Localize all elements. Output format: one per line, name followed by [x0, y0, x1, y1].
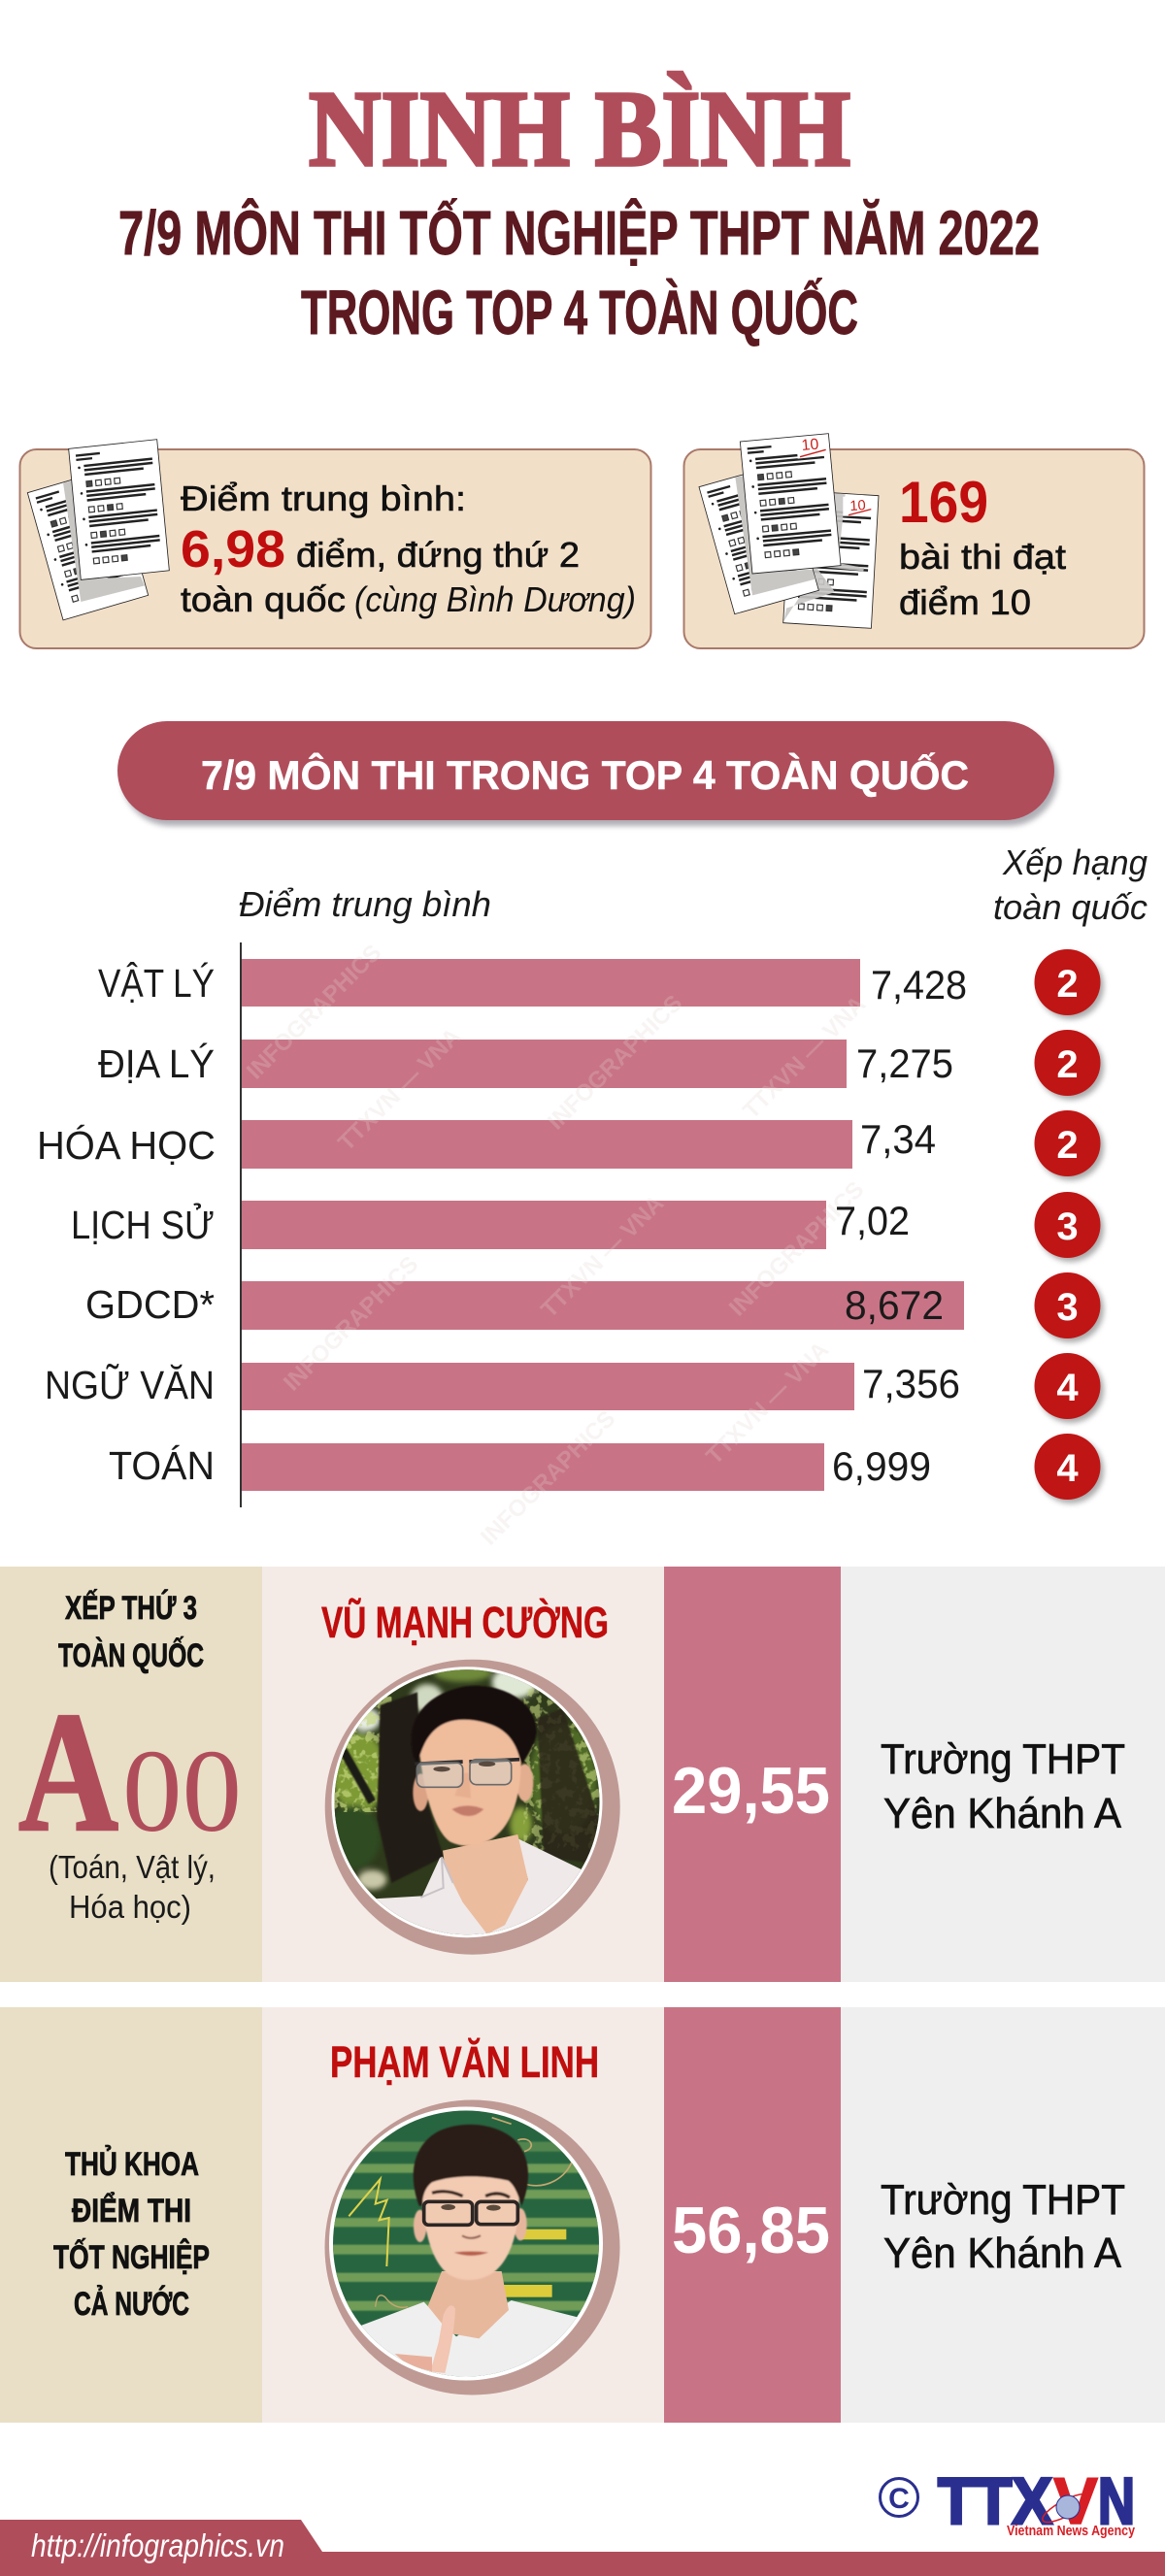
subject labels: VẬT LÝ [98, 961, 215, 1006]
values: 7,34 [860, 1116, 936, 1162]
rank label: ĐIỂM THI [72, 2193, 191, 2229]
icon: copyright [880, 2479, 918, 2516]
values [832, 962, 967, 1489]
text: average score [181, 479, 636, 619]
panel: average score [19, 440, 650, 648]
rank label: TỐT NGHIỆP [53, 2238, 210, 2276]
exam block subjects: (Toán, Vật lý, [49, 1849, 216, 1885]
logo: TTXVN [880, 2464, 1136, 2539]
school: Trường THPT [881, 1735, 1125, 1783]
title: province name: NINH BÌNH [309, 70, 850, 189]
values: 8,672 [845, 1282, 944, 1328]
subject labels: NGỮ VĂN [45, 1363, 215, 1407]
rank badges: 4 [1056, 1447, 1079, 1490]
logo wordmark: TTX [938, 2464, 1052, 2538]
watermarks: TTXVN — VNA [536, 1190, 669, 1323]
score: 56,85 [672, 2194, 830, 2267]
text: average score: Điểm trung bình: [181, 479, 466, 518]
exam block subjects [49, 1849, 216, 1925]
icon: graded exam papers: 10 [801, 436, 819, 454]
student name: PHẠM VĂN LINH [330, 2037, 599, 2087]
text: perfect scores: điểm 10 [899, 582, 1031, 622]
subject labels: GDCD* [85, 1282, 215, 1327]
icon: graded exam papers [699, 434, 879, 628]
school: Trường THPT [881, 2176, 1125, 2224]
rank label: XẾP THỨ 3 [65, 1590, 197, 1627]
text: average score: điểm, đứng thứ 2 [296, 535, 580, 575]
footer url: http://infographics.vn [31, 2527, 284, 2563]
subject labels: ĐỊA LÝ [98, 1041, 215, 1086]
icon: exam papers [27, 440, 169, 620]
watermarks: INFOGRAPHICS [242, 940, 386, 1084]
text: perfect scores: bài thi đạt [899, 537, 1066, 577]
school: Yên Khánh A [883, 2229, 1122, 2277]
values: 7,356 [862, 1361, 960, 1406]
logo wordmark: N [1098, 2464, 1135, 2538]
rank label [53, 2146, 210, 2323]
heading pill: 7/9 MÔN THI TRONG TOP 4 TOÀN QUỐC [201, 751, 969, 798]
exam block A00: A [18, 1677, 118, 1867]
values: 7,275 [856, 1040, 953, 1086]
rank badges: 2 [1056, 1043, 1079, 1086]
subtitle line 2: TRONG TOP 4 TOÀN QUỐC [301, 278, 858, 347]
bar chart [37, 940, 1104, 1550]
watermarks: INFOGRAPHICS [724, 1176, 869, 1321]
rank column title: Xếp hạng [1002, 842, 1148, 882]
watermarks: INFOGRAPHICS [279, 1251, 423, 1396]
watermarks [242, 940, 871, 1550]
text: perfect scores [899, 470, 1066, 622]
watermarks: TTXVN — VNA [738, 991, 871, 1124]
panel: student Vũ Mạnh Cường [0, 1567, 1165, 1982]
axis title: Điểm trung bình [239, 884, 491, 924]
watermarks: INFOGRAPHICS [543, 990, 687, 1135]
exam block A00 [18, 1677, 242, 1867]
school [881, 2176, 1125, 2277]
portrait [323, 1657, 620, 1955]
icon: copyright: C [888, 2483, 910, 2515]
panel: student Phạm Văn Linh [0, 2007, 1165, 2423]
values: 7,02 [835, 1198, 910, 1243]
panel: perfect scores [683, 434, 1144, 648]
rank badges: 3 [1056, 1205, 1079, 1248]
portrait [323, 2099, 619, 2395]
rank badges: 3 [1056, 1286, 1079, 1329]
bars [241, 959, 964, 1491]
logo wordmark: V [1053, 2464, 1098, 2538]
school [881, 1735, 1125, 1837]
rank badges: 4 [1056, 1367, 1079, 1409]
icon: graded exam papers: 10 [849, 498, 866, 514]
watermarks: TTXVN — VNA [701, 1337, 834, 1470]
rank column title [993, 842, 1148, 927]
watermarks: INFOGRAPHICS [476, 1405, 620, 1550]
rank label: TOÀN QUỐC [58, 1636, 204, 1674]
student name: VŨ MẠNH CƯỜNG [321, 1598, 609, 1647]
text: perfect scores: 169 [899, 470, 988, 535]
exam block subjects: Hóa học) [69, 1889, 191, 1925]
values: 6,999 [832, 1443, 931, 1489]
rank badges: 2 [1056, 963, 1079, 1006]
school: Yên Khánh A [883, 1790, 1122, 1837]
chart headers [239, 842, 1148, 927]
subject labels: HÓA HỌC [37, 1123, 216, 1168]
logo wordmark: Vietnam News Agency [1007, 2523, 1136, 2539]
score: 29,55 [672, 1754, 830, 1828]
rank label: THỦ KHOA [65, 2146, 199, 2183]
exam block A00: 00 [122, 1726, 242, 1857]
text: average score: toàn quốc [181, 579, 346, 619]
logo wordmark [938, 2464, 1136, 2539]
rank badges: 2 [1056, 1124, 1079, 1167]
subject labels: TOÁN [109, 1443, 215, 1488]
watermarks: TTXVN — VNA [333, 1023, 466, 1156]
values: 7,428 [871, 962, 967, 1007]
footer band [0, 2520, 1165, 2576]
title [118, 70, 1040, 347]
subject labels: LỊCH SỬ [71, 1203, 215, 1247]
rank label: CẢ NƯỚC [74, 2286, 189, 2323]
text: average score: (cùng Bình Dương) [354, 579, 636, 619]
rank column title: toàn quốc [993, 887, 1148, 927]
text: average score: 6,98 [181, 520, 285, 578]
subject labels [37, 961, 216, 1488]
rank label [58, 1590, 204, 1674]
heading pill [117, 721, 1058, 826]
rank badges [1035, 949, 1104, 1503]
